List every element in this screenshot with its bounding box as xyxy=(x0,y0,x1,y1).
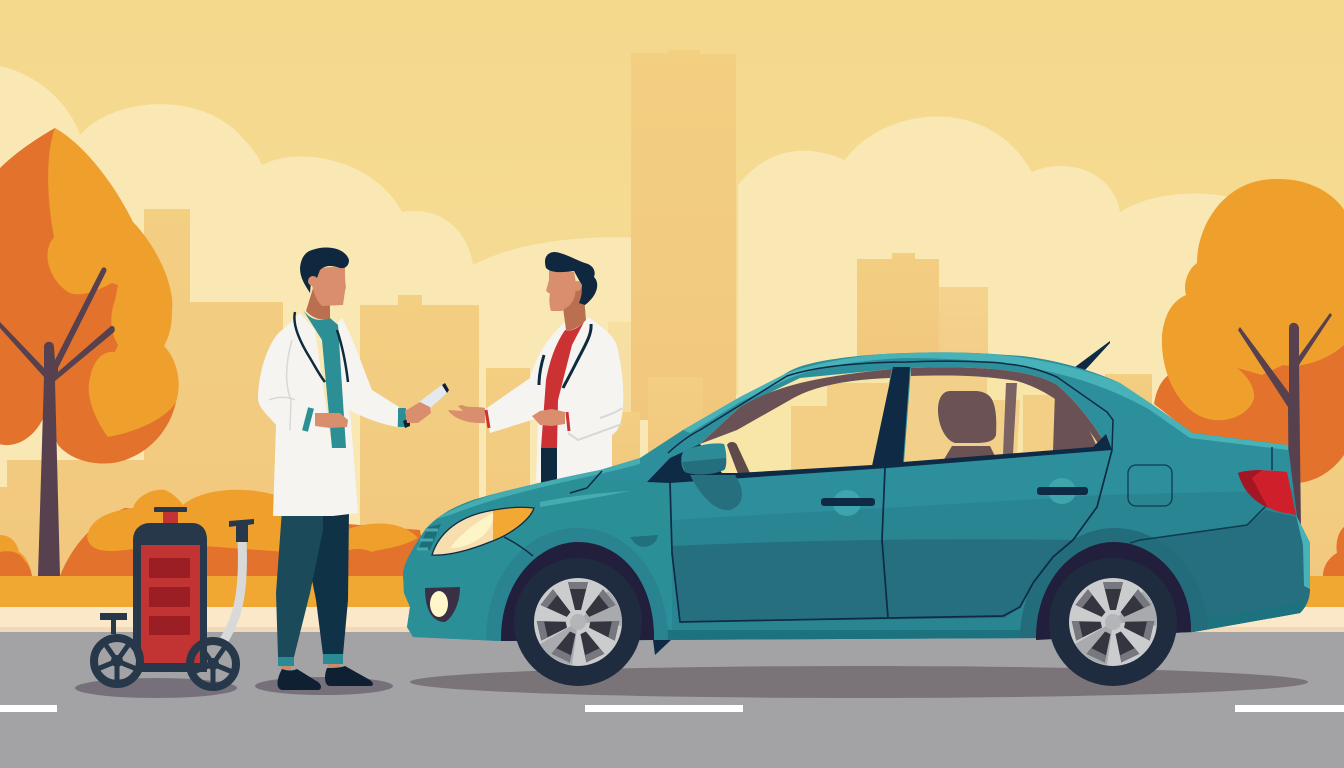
rear quarter interior xyxy=(1053,392,1097,451)
hose xyxy=(224,540,242,640)
rear window glass xyxy=(904,367,1107,462)
face xyxy=(312,266,346,306)
rear window pale area xyxy=(987,375,1053,455)
roof highlight xyxy=(683,352,1288,450)
tail light xyxy=(1238,470,1296,515)
rear quarter lower tone xyxy=(1155,510,1310,633)
neck xyxy=(560,285,586,330)
panel slots xyxy=(149,558,190,635)
stethoscope xyxy=(539,324,591,388)
coat folds xyxy=(568,408,622,440)
ground strip xyxy=(0,576,1344,607)
trouser cuffs xyxy=(278,654,343,666)
right cuff xyxy=(398,408,406,427)
handle xyxy=(100,613,127,634)
front wheel xyxy=(514,558,642,686)
hedges and bushes xyxy=(0,490,1344,576)
coat right side and sleeve xyxy=(338,318,399,513)
city skyline buildings xyxy=(0,50,1344,600)
resting hand xyxy=(532,409,565,426)
ankles and shoes xyxy=(278,664,373,690)
stethoscope xyxy=(294,312,348,382)
red panel xyxy=(141,545,200,663)
b pillar inner post xyxy=(1003,383,1017,455)
ear xyxy=(572,281,582,291)
coat fold xyxy=(269,340,295,430)
hair xyxy=(545,252,597,305)
reaching hand xyxy=(448,405,485,423)
mirror shadow xyxy=(690,475,742,510)
front wheel arch xyxy=(501,542,654,641)
road lane markings xyxy=(0,705,1344,712)
near trouser leg xyxy=(276,510,323,657)
fog lamp xyxy=(425,587,460,622)
front window scenery xyxy=(791,383,892,470)
shadows on road xyxy=(75,666,1308,698)
trousers xyxy=(541,448,557,484)
right tree xyxy=(1154,179,1344,530)
mud flap xyxy=(653,640,671,655)
car xyxy=(400,340,1320,686)
grille xyxy=(417,524,441,550)
coat xyxy=(258,313,358,516)
body bottom stripe xyxy=(650,602,1305,642)
door mid tone xyxy=(672,490,1300,650)
diagnostic machine cart xyxy=(94,507,254,688)
cap xyxy=(154,507,187,525)
steering wheel xyxy=(727,442,750,474)
red cuffs xyxy=(486,410,569,431)
machine body xyxy=(133,523,207,672)
red shirt xyxy=(541,322,584,448)
ear xyxy=(308,276,318,286)
left hand xyxy=(315,413,348,428)
hair xyxy=(300,247,349,293)
left tree xyxy=(0,128,179,576)
side mirror xyxy=(681,443,726,474)
hood highlight xyxy=(433,458,640,520)
first doctor (left) xyxy=(258,247,449,690)
trunk panel line and rear crease xyxy=(1130,447,1272,543)
wheels xyxy=(94,638,140,685)
handheld device xyxy=(403,383,449,428)
car body xyxy=(400,340,1320,650)
hand holding device xyxy=(405,402,431,423)
neck xyxy=(306,285,330,320)
rear wheel arch xyxy=(1036,542,1191,640)
teal shirt xyxy=(303,310,346,448)
door handles xyxy=(821,478,1088,516)
second doctor (right, behind car) xyxy=(448,252,623,484)
fender arch flare xyxy=(486,528,668,641)
side marker xyxy=(630,535,658,547)
far trouser leg xyxy=(310,510,349,655)
clouds xyxy=(0,66,1344,600)
door lower tone xyxy=(672,539,1075,622)
hose nozzle xyxy=(229,519,254,542)
window frame line xyxy=(668,361,1113,453)
seat xyxy=(938,391,996,461)
road xyxy=(0,632,1344,768)
white coat xyxy=(484,318,623,482)
hood crease xyxy=(504,471,602,556)
front fender and bumper tone xyxy=(403,480,648,641)
b pillar xyxy=(872,367,910,466)
sidewalk xyxy=(0,607,1344,633)
rear window scenery xyxy=(1023,395,1053,452)
fuel cap xyxy=(1128,465,1172,506)
rear window brown band xyxy=(911,367,1107,447)
front window brown band xyxy=(700,369,892,444)
shirt below coat trousers xyxy=(333,448,348,518)
left cuff xyxy=(305,408,311,431)
antenna xyxy=(1075,341,1110,371)
rear bumper highlight xyxy=(1296,515,1310,589)
front window glass xyxy=(700,369,892,474)
window sill and mirror triangle xyxy=(647,434,1112,483)
rear wheel xyxy=(1049,558,1177,686)
headlight xyxy=(432,507,534,555)
face xyxy=(546,270,576,311)
door outlines xyxy=(670,450,1112,622)
